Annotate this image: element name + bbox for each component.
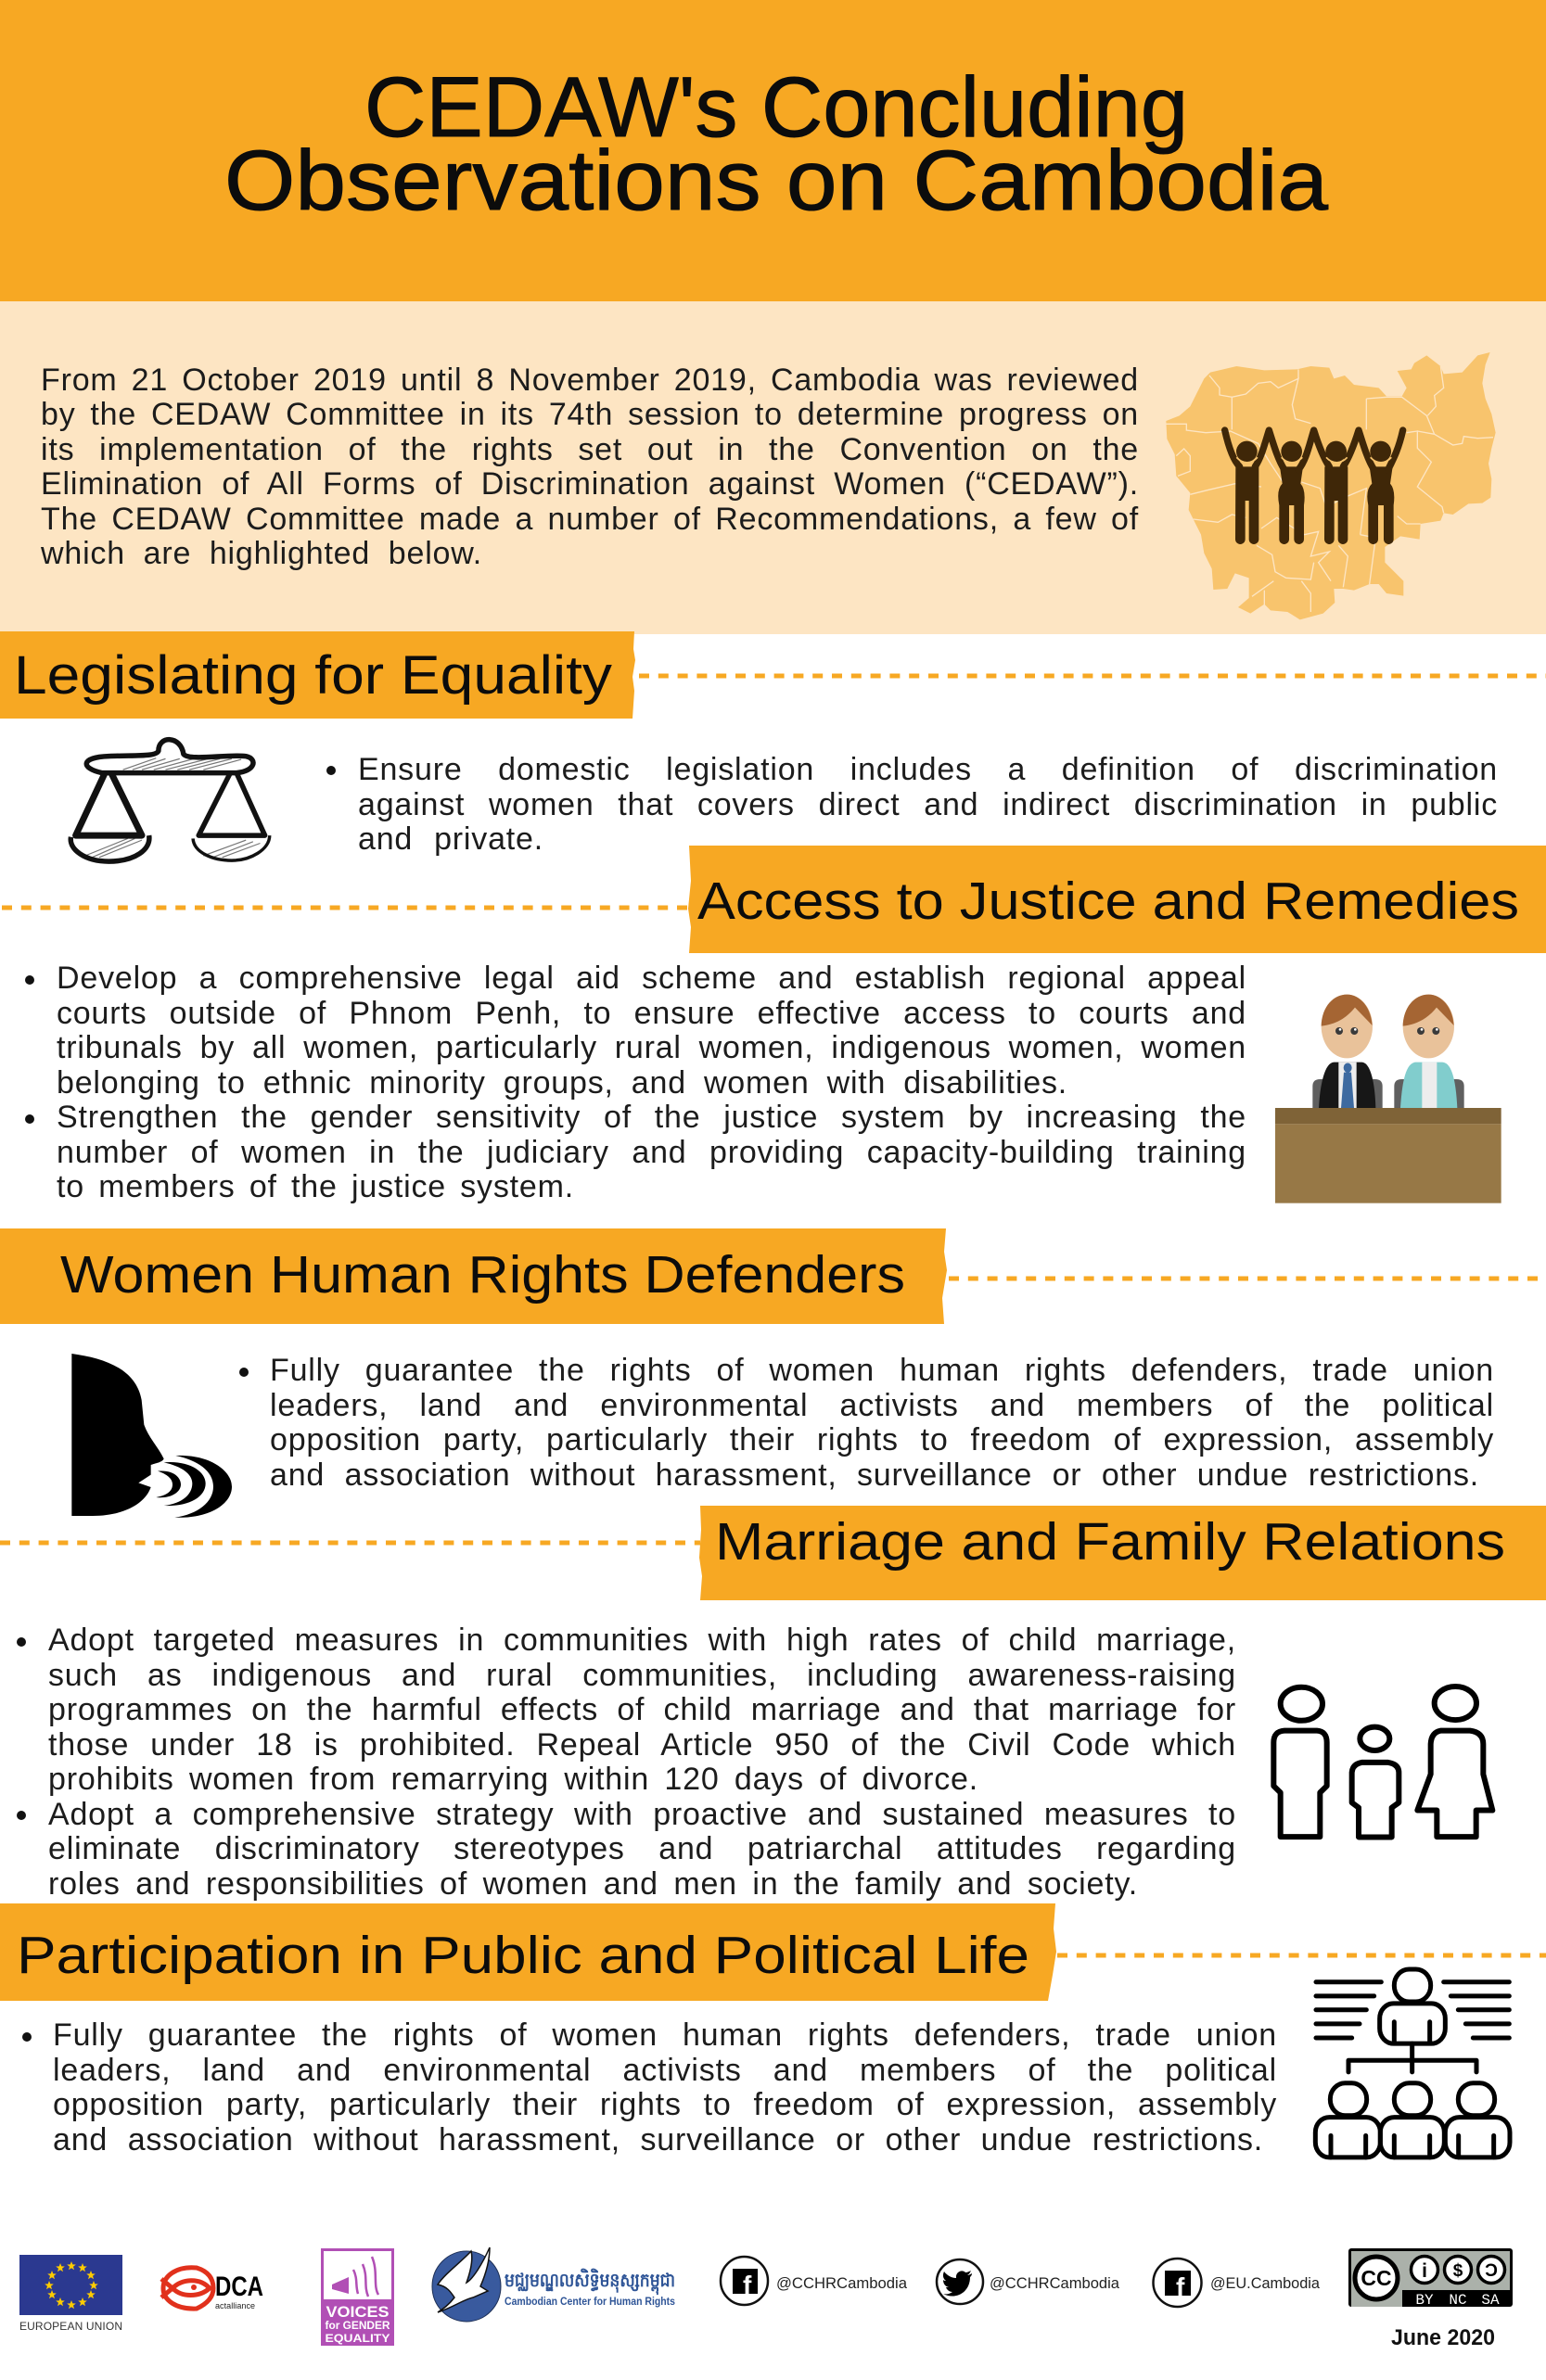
text block: legislating recommendation: and private. bbox=[358, 821, 543, 857]
text block: marriage and family recommendations bbox=[17, 1623, 1236, 1901]
text block: defenders recommendation: leaders, land and environmental activists and members of the political bbox=[270, 1387, 1494, 1422]
text block: access to justice recommendations: tribunals by all women, particularly rural women, indigenous women, women bbox=[57, 1030, 1246, 1065]
text block: marriage and family recommendations: Adopt targeted measures in communities with high rates of child marriage, bbox=[48, 1623, 1236, 1658]
social: Facebook EU.Cambodia bbox=[1154, 2259, 1321, 2307]
text block: access to justice recommendations: number of women in the judiciary and providing capacity-building training bbox=[57, 1135, 1246, 1170]
badge: Creative Commons BY NC SA: CC bbox=[1361, 2266, 1392, 2290]
text block: marriage and family recommendations: prohibits women from remarrying within 120 days of divorce. bbox=[48, 1762, 978, 1797]
badge: Creative Commons BY NC SA: Ɔ bbox=[1485, 2261, 1498, 2281]
text block: access to justice recommendations bbox=[25, 961, 1246, 1204]
logo: Voices for Gender Equality: EQUALITY bbox=[325, 2332, 390, 2345]
text block: defenders recommendation: opposition party, particularly their rights to freedom of expression, assembly bbox=[270, 1422, 1494, 1457]
logo: European Union: EUROPEAN UNION bbox=[19, 2320, 122, 2333]
social: Facebook CCHRCambodia: f bbox=[743, 2271, 752, 2299]
text block: introduction bbox=[41, 362, 1139, 571]
text block: introduction: The CEDAW Committee made a number of Recommendations, a few of bbox=[41, 501, 1139, 536]
text block: participation recommendation: opposition party, particularly their rights to freedom of expression, assembly bbox=[53, 2087, 1277, 2122]
text block: marriage and family recommendations: such as indigenous and rural communities, including awareness-raising bbox=[48, 1658, 1236, 1693]
section bar: Marriage and Family Relations bbox=[699, 1506, 1546, 1600]
text block: introduction: by the CEDAW Committee in its 74th session to determine progress on bbox=[41, 397, 1139, 432]
icon: Cambodia map with people holding hands bbox=[1166, 352, 1496, 619]
text block: marriage and family recommendations: those under 18 is prohibited. Repeal Article 950 of the Civil Code which bbox=[48, 1726, 1236, 1762]
title: Observations on Cambodia bbox=[224, 134, 1329, 228]
badge: Creative Commons BY NC SA: NC bbox=[1449, 2292, 1467, 2309]
social: Twitter CCHRCambodia bbox=[937, 2259, 1120, 2304]
badge: Creative Commons BY NC SA: SA bbox=[1481, 2292, 1500, 2309]
logo: DCA actalliance bbox=[161, 2268, 263, 2310]
social: Facebook EU.Cambodia: @EU.Cambodia bbox=[1210, 2274, 1321, 2292]
text block: introduction: From 21 October 2019 until 8 November 2019, Cambodia was reviewed bbox=[41, 362, 1139, 397]
text block: introduction: Elimination of All Forms of Discrimination against Women (“CEDAW”). bbox=[41, 466, 1139, 502]
social: Twitter CCHRCambodia: @CCHRCambodia bbox=[990, 2274, 1120, 2292]
section bar: Legislating for Equality: Legislating for Equality bbox=[14, 645, 612, 706]
social: Facebook CCHRCambodia: @CCHRCambodia bbox=[776, 2274, 908, 2292]
text block: participation recommendation: and association without harassment, surveillance or other undue restrictions. bbox=[53, 2121, 1263, 2157]
text block: legislating recommendation bbox=[326, 752, 1498, 857]
text block: defenders recommendation: Fully guarantee the rights of women human rights defenders, trade union bbox=[270, 1353, 1494, 1388]
title bbox=[224, 60, 1329, 228]
icon: hierarchy of people bbox=[1315, 1969, 1510, 2157]
text block: access to justice recommendations: courts outside of Phnom Penh, to ensure effective access to courts and bbox=[57, 996, 1246, 1031]
section bar: Women Human Rights Defenders bbox=[0, 1228, 947, 1324]
logo: Cambodian Center for Human Rights: មជ្ឈមណ្ឌលសិទ្ធិមនុស្សកម្ពុជា bbox=[505, 2268, 675, 2296]
text block: marriage and family recommendations: roles and responsibilities of women and men in the family and society. bbox=[48, 1865, 1138, 1901]
logo: Cambodian Center for Human Rights: Cambodian Center for Human Rights bbox=[505, 2295, 675, 2308]
social: Facebook CCHRCambodia bbox=[721, 2257, 908, 2305]
logo: Voices for Gender Equality: VOICES bbox=[326, 2303, 390, 2321]
icon: scales of justice bbox=[70, 740, 270, 861]
logo: DCA actalliance: actalliance bbox=[215, 2301, 255, 2310]
text block: participation recommendation: Fully guarantee the rights of women human rights defenders, trade union bbox=[53, 2017, 1277, 2053]
badge: Creative Commons BY NC SA: $ bbox=[1453, 2261, 1463, 2281]
badge: Creative Commons BY NC SA: BY bbox=[1415, 2292, 1434, 2309]
text block: defenders recommendation bbox=[239, 1353, 1494, 1493]
text block: participation recommendation bbox=[22, 2017, 1277, 2157]
intro panel background bbox=[0, 301, 1546, 634]
section bar: Legislating for Equality bbox=[0, 631, 635, 719]
text block: access to justice recommendations: Strengthen the gender sensitivity of the justice system by increasing the bbox=[57, 1100, 1246, 1135]
icon: family of three bbox=[1273, 1686, 1492, 1837]
icon: two people at a court bench bbox=[1275, 995, 1501, 1203]
text block: participation recommendation: leaders, land and environmental activists and members of the political bbox=[53, 2053, 1277, 2088]
logo: European Union bbox=[19, 2255, 122, 2333]
date: June 2020 bbox=[1391, 2325, 1495, 2350]
figures bbox=[1235, 441, 1394, 544]
text block: marriage and family recommendations: Adopt a comprehensive strategy with proactive and sustained measures to bbox=[48, 1797, 1236, 1832]
text block: legislating recommendation: against women that covers direct and indirect discrimination in public bbox=[358, 786, 1498, 821]
text block: defenders recommendation: and association without harassment, surveillance or other undue restrictions. bbox=[270, 1457, 1479, 1493]
text block: access to justice recommendations: belonging to ethnic minority groups, and women with disabilities. bbox=[57, 1064, 1067, 1100]
text block: introduction: its implementation of the rights set out in the Convention on the bbox=[41, 432, 1139, 467]
social: Facebook EU.Cambodia: f bbox=[1176, 2272, 1185, 2301]
text block: legislating recommendation: Ensure domestic legislation includes a definition of discrimination bbox=[358, 752, 1498, 787]
badge: Creative Commons BY NC SA: i bbox=[1422, 2260, 1427, 2282]
section bar: Women Human Rights Defenders: Women Human Rights Defenders bbox=[60, 1245, 905, 1305]
text block: marriage and family recommendations: eliminate discriminatory stereotypes and patriarchal attitudes regarding bbox=[48, 1831, 1236, 1866]
title: CEDAW's Concluding bbox=[364, 60, 1188, 155]
logo: DCA actalliance: DCA bbox=[215, 2272, 263, 2302]
section bar: Access to Justice and Remedies bbox=[688, 846, 1546, 953]
section bar: Participation in Public and Political Life: Participation in Public and Political Life bbox=[17, 1926, 1029, 1985]
text block: access to justice recommendations: to members of the justice system. bbox=[57, 1169, 574, 1204]
logo: Voices for Gender Equality bbox=[321, 2248, 394, 2346]
text block: introduction: which are highlighted below. bbox=[41, 536, 482, 571]
section bar: Participation in Public and Political Life bbox=[0, 1903, 1056, 2001]
text block: marriage and family recommendations: programmes on the harmful effects of child marriage and that marriage for bbox=[48, 1692, 1236, 1727]
text block: access to justice recommendations: Develop a comprehensive legal aid scheme and establish regional appeal bbox=[57, 961, 1246, 996]
header band bbox=[0, 0, 1546, 301]
logo: Voices for Gender Equality: for GENDER bbox=[325, 2319, 390, 2332]
badge: Creative Commons BY NC SA bbox=[1348, 2248, 1513, 2309]
section bar: Access to Justice and Remedies: Access to Justice and Remedies bbox=[697, 872, 1519, 931]
section bar: Marriage and Family Relations: Marriage and Family Relations bbox=[715, 1512, 1505, 1572]
icon: speaking head bbox=[71, 1354, 232, 1518]
logo: Cambodian Center for Human Rights bbox=[432, 2247, 675, 2322]
